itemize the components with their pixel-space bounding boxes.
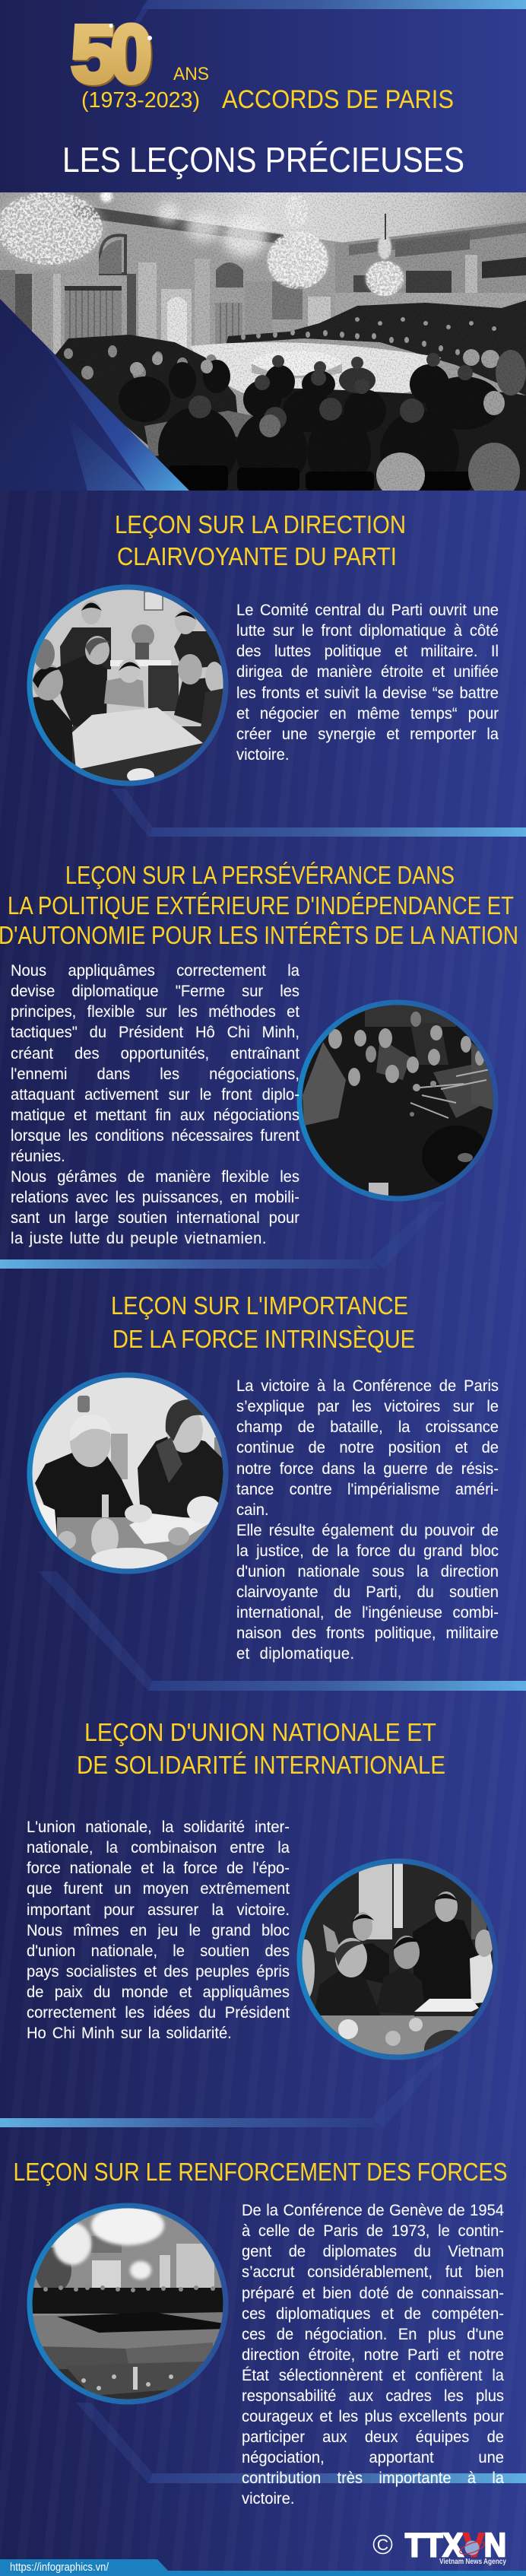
section 3 body text: notre force dans la guerre de résis- [236, 1460, 499, 1477]
section 5 decoration [76, 2403, 526, 2483]
section 1 body text: les fronts et suivit la devise “se battre [236, 684, 499, 701]
section 1 heading: LEÇON SUR LA DIRECTION [115, 511, 406, 539]
section 4 body text: important pour assurer la victoire. [27, 1901, 290, 1918]
section 3 body text: La victoire à la Conférence de Paris [236, 1377, 499, 1395]
section 1 heading: CLAIRVOYANTE DU PARTI [117, 543, 397, 571]
section 3 body text: cain. [236, 1501, 269, 1519]
section 5 body text: ces de négociation. En plus d'une [242, 2326, 504, 2343]
section 3 heading: DE LA FORCE INTRINSÈQUE [112, 1326, 415, 1354]
section 4 body text: Nous mîmes en jeu le grand bloc [27, 1922, 290, 1939]
section 2 body text: créant des opportunités, entraînant [11, 1045, 299, 1062]
gold number 50: 0 [110, 8, 152, 100]
section 3 body text: international, de l'ingénieuse combi- [236, 1604, 499, 1622]
section 5 round photo [27, 2203, 232, 2407]
section 2 body text: devise diplomatique "Ferme sur les [11, 983, 299, 1000]
section 2 body text: Nous appliquâmes correctement la [11, 962, 299, 980]
main title: LES LEÇONS PRÉCIEUSES [62, 140, 464, 179]
hero corner triangle [0, 299, 189, 491]
section 5 body text: négociation, apportant une [242, 2449, 504, 2466]
section 4 heading: LEÇON D'UNION NATIONALE ET [84, 1719, 436, 1747]
section 3 round photo [27, 1372, 232, 1574]
section 5 body text: préparé et bien doté de connaissan- [242, 2285, 504, 2301]
section 5 body text: contribution très importante à la [242, 2470, 504, 2487]
section 1 body text: créer une synergie et remporter la [236, 726, 499, 743]
section 3 heading: LEÇON SUR L'IMPORTANCE [111, 1292, 408, 1320]
section 2 decoration [0, 1202, 445, 1269]
section 3 body text: champ de bataille, la croissance [236, 1418, 499, 1436]
header band [62, 0, 526, 179]
section 1 body text: Le Comité central du Parti ouvrit une [236, 602, 499, 619]
years: (1973-2023) [81, 88, 200, 113]
section 3 body text: la justice, de la force du grand bloc [236, 1542, 499, 1560]
copyright symbol: C [377, 2536, 388, 2554]
section 5 body text: courageux et les plus excellents pour [242, 2408, 504, 2425]
section 5 body text: responsabilité aux cadres les plus [242, 2387, 504, 2405]
section 1 body text: lutte sur le front diplomatique à côté [236, 622, 499, 640]
gold number 50: 5 [72, 9, 118, 101]
TTXVN logo: TTXVN [405, 2527, 506, 2564]
section 2 body text: sant un large soutien international pour [11, 1209, 299, 1227]
section 4 heading [77, 1719, 445, 1780]
section 5 body text: participer aux deux équipes de [242, 2428, 504, 2446]
section 2 body text: principes, flexible sur les méthodes et [11, 1003, 299, 1021]
hall chandeliers and light glow [0, 190, 404, 296]
section 3 body text: continue de notre position et de [236, 1439, 499, 1456]
section 3 body text: naison des fronts politique, militaire [236, 1625, 499, 1642]
TTXVN logo: Vietnam News Agency [439, 2558, 506, 2566]
back row of press and delegates [227, 300, 526, 395]
section 2 body text: tactiques" du Président Hô Chi Minh, [11, 1024, 299, 1041]
section 2 body text [11, 962, 299, 1247]
gold number 50: 0 [112, 9, 154, 101]
section 2 body text: relations avec les puissances, en mobili- [11, 1189, 299, 1206]
section 4 body text: pays socialistes et des peuples épris [27, 1963, 290, 1980]
section 5 body text: à celle de Paris de 1973, le contin- [242, 2222, 504, 2240]
section 3 body text: clairvoyante du Parti, du soutien [236, 1583, 499, 1601]
section 3 decoration [38, 1571, 526, 1691]
gold number 50: 5 [71, 8, 116, 100]
section 4 body text: Ho Chi Minh sur la solidarité. [27, 2025, 232, 2042]
section 5 body text: De la Conférence de Genève de 1954 [242, 2202, 504, 2219]
section 3 body text: d'union nationale sous la direction [236, 1563, 499, 1580]
label ANS: ANS [173, 64, 209, 84]
section 2 body text: attaquant activement sur le front diplo- [11, 1086, 299, 1104]
section 2 body text: la juste lutte du peuple vietnamien. [11, 1230, 267, 1247]
section 4 body text: force nationale et la force de l'épo- [27, 1860, 290, 1877]
section 5 body text: gent de diplomates du Vietnam [242, 2243, 504, 2260]
section 2 round photo [296, 999, 502, 1202]
section 2 body text: lorsque les conditions nécessaires furent [11, 1127, 299, 1145]
section 4 body text: de paix du monde et appliquâmes [27, 1984, 290, 2001]
section 2 body text: l'ennemi dans les négociations, [11, 1066, 299, 1083]
section 3 body text: s’explique par les victoires sur le [236, 1398, 499, 1415]
section 4 body text: correctement les idées du Président [27, 2004, 290, 2022]
section 3 heading [111, 1292, 415, 1354]
section 1 body text: et négocier en même temps“ pour [236, 705, 499, 723]
hero photo: conference hall [0, 190, 526, 500]
section 5 body text [242, 2202, 505, 2508]
section 2 body text: matique et mettant fin aux négociations [11, 1107, 299, 1124]
section 2 heading [0, 862, 518, 950]
footer tab and url: https://infographics.vn/ [10, 2561, 109, 2574]
section 5 body text: s’accrut considérablement, fut bien [242, 2263, 504, 2281]
section 4 decoration [0, 2057, 445, 2127]
section 3 body text: tance contre l'impérialisme améri- [236, 1481, 499, 1498]
conference table [190, 342, 441, 393]
section 4 round photo [296, 1858, 502, 2069]
section 4 body text: L'union nationale, la solidarité inter- [27, 1818, 290, 1836]
section 3 body text: Elle résulte également du pouvoir de [236, 1522, 499, 1539]
copyright symbol [374, 2536, 392, 2554]
footer tab and url [0, 2559, 526, 2576]
section 4 body text [27, 1818, 290, 2042]
section 2 body text: réunies. [11, 1148, 65, 1165]
section 1 round photo [27, 584, 232, 791]
gold number 50 [71, 8, 154, 101]
foreground delegates [55, 335, 526, 491]
accords de paris: ACCORDS DE PARIS [222, 85, 454, 114]
section 1 heading [115, 511, 406, 571]
section 4 body text: que furent un moyen extrêmement [27, 1880, 290, 1898]
section 3 body text [236, 1377, 499, 1663]
section 5 body text: ces diplomatiques et de compéten- [242, 2305, 504, 2323]
section 1 body text: dirigea de manière étroite et unifiée [236, 663, 499, 681]
section 1 decoration [111, 789, 526, 837]
section 2 body text: Nous gérâmes de manière flexible les [11, 1168, 299, 1186]
section 1 body text [236, 602, 499, 764]
section 5 body text: direction étroite, notre Parti et notre [242, 2346, 504, 2364]
section 1 body text: des luttes politique et militaire. Il [236, 643, 499, 660]
section 1 body text: victoire. [236, 746, 289, 764]
section 3 body text: et diplomatique. [236, 1645, 355, 1663]
section 4 body text: nationale, la combinaison entre la [27, 1839, 290, 1857]
section 5 body text: État sélectionnèrent et confièrent la [242, 2367, 504, 2384]
section 5 body text: victoire. [242, 2490, 294, 2508]
section 4 body text: d'union nationale, le soutien des [27, 1942, 290, 1960]
section 4 heading: DE SOLIDARITÉ INTERNATIONALE [77, 1752, 445, 1780]
